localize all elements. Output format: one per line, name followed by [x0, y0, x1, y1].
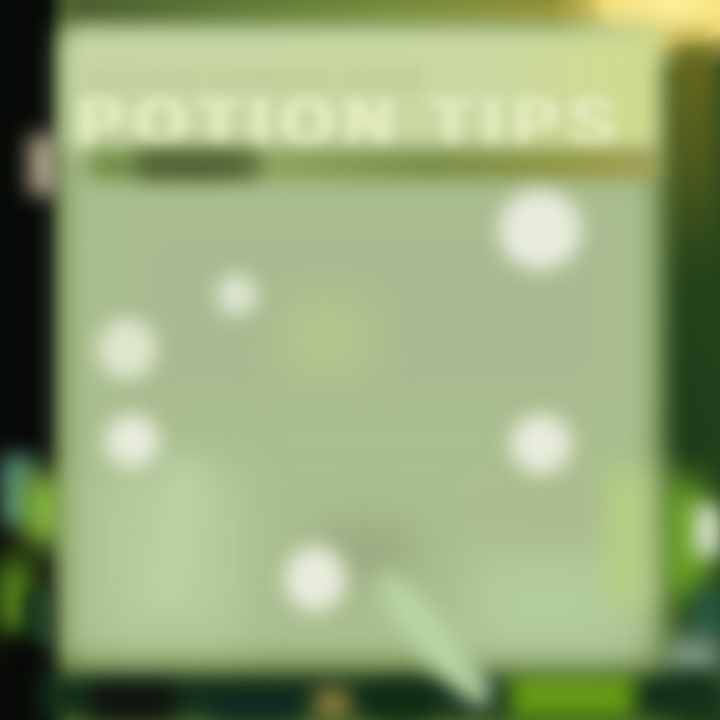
icon: right circle: [510, 414, 572, 474]
icon: left circle lower: [104, 414, 160, 468]
divider band beneath title: [76, 133, 669, 195]
title: POTION TIPS: [78, 84, 626, 160]
header: title background: [66, 32, 656, 150]
icon: bottom centre circle: [284, 546, 346, 612]
icon: top right circle: [498, 190, 582, 270]
leaf: pale blade crossing the lower panel: [368, 566, 502, 715]
icon: left circle upper: [97, 318, 157, 380]
heading: subtitle line: POTION GARDEN GUIDE: [90, 64, 428, 94]
icon: small centre circle: [216, 274, 258, 316]
